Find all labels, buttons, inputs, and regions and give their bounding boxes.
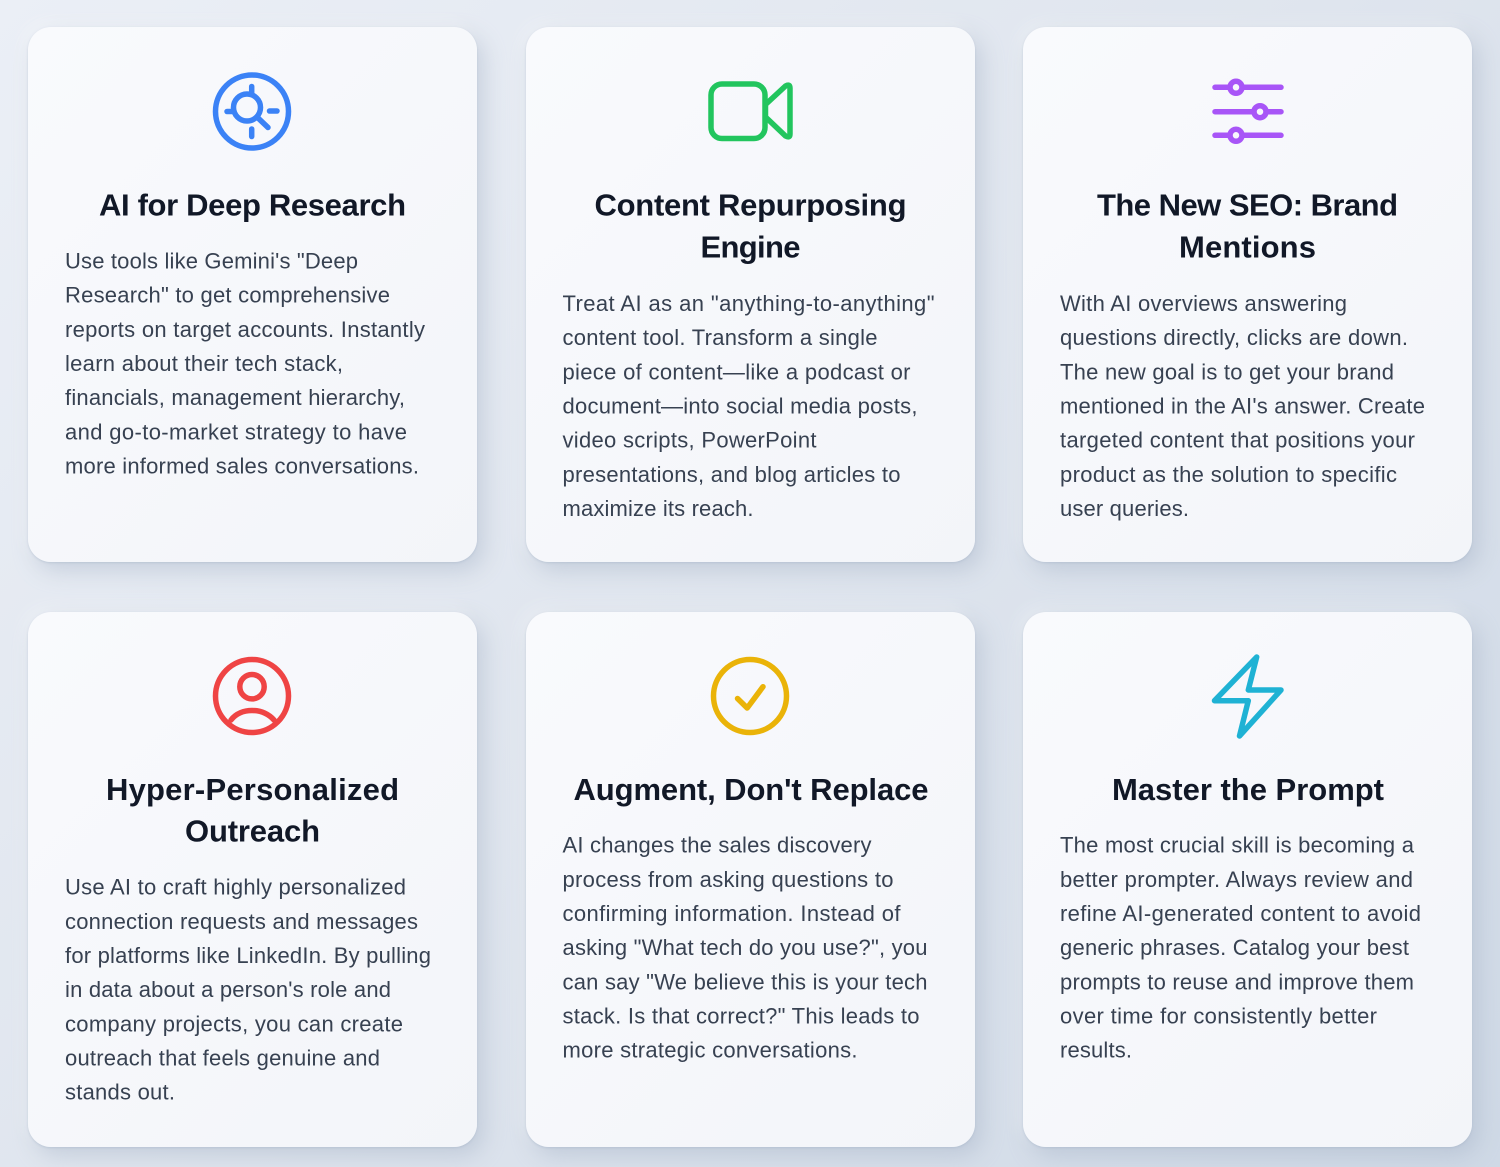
text block: generic phrases. Catalog your best	[1060, 935, 1409, 960]
text block: content tool. Transform a single	[562, 325, 877, 350]
heading: Hyper-Personalized	[106, 772, 399, 807]
text block: presentations, and blog articles to	[562, 462, 900, 487]
text block: piece of content—like a podcast or	[562, 359, 910, 384]
heading	[1097, 188, 1398, 264]
heading: Master the Prompt	[1112, 772, 1384, 807]
text block: product as the solution to specific	[1060, 462, 1397, 487]
text block: financials, management hierarchy,	[65, 385, 405, 410]
text block: user queries.	[1060, 496, 1189, 521]
text block: Research" to get comprehensive	[65, 283, 390, 308]
panel: Hyper-Personalized Outreach	[28, 612, 477, 1147]
heading: Mentions	[1179, 230, 1316, 264]
text block: and go-to-market strategy to have	[65, 419, 407, 444]
text block: over time for consistently better	[1060, 1003, 1377, 1028]
text block: can say "We believe this is your tech	[562, 969, 927, 994]
text block: video scripts, PowerPoint	[562, 428, 816, 453]
text block: outreach that feels genuine and	[65, 1045, 380, 1070]
text block: AI changes the sales discovery	[562, 833, 871, 858]
text block: company projects, you can create	[65, 1011, 403, 1036]
icon: sliders	[1215, 81, 1281, 141]
icon: research target with magnifier	[216, 75, 288, 148]
text block: With AI overviews answering	[1060, 291, 1347, 316]
text block	[1060, 291, 1425, 521]
panel: Augment, Don't Replace	[526, 612, 974, 1147]
icon: lightning bolt	[1214, 657, 1281, 736]
text block: document—into social media posts,	[562, 393, 917, 418]
heading: Outreach	[185, 814, 320, 849]
text block: prompts to reuse and improve them	[1060, 969, 1414, 994]
text block: The new goal is to get your brand	[1060, 359, 1394, 384]
text block: targeted content that positions your	[1060, 428, 1415, 453]
text block	[562, 291, 934, 521]
text block: maximize its reach.	[562, 496, 753, 521]
heading: Engine	[700, 230, 800, 264]
heading: Augment, Don't Replace	[573, 772, 928, 807]
text block: for platforms like LinkedIn. By pulling	[65, 943, 431, 968]
heading: AI for Deep Research	[99, 188, 406, 222]
text block: reports on target accounts. Instantly	[65, 317, 425, 342]
icon: user in circle	[216, 660, 288, 732]
text block: more informed sales conversations.	[65, 453, 419, 478]
text block: questions directly, clicks are down.	[1060, 325, 1408, 350]
panel: AI for Deep Research	[28, 27, 477, 562]
text block	[65, 875, 431, 1105]
text block: in data about a person's role and	[65, 977, 391, 1002]
text block	[65, 248, 425, 478]
text block: asking "What tech do you use?", you	[562, 935, 927, 960]
text block: connection requests and messages	[65, 909, 418, 934]
text block: results.	[1060, 1038, 1132, 1063]
text block: stands out.	[65, 1080, 175, 1105]
text block: process from asking questions to	[562, 867, 893, 892]
text block: stack. Is that correct?" This leads to	[562, 1003, 919, 1028]
text block	[1060, 833, 1421, 1063]
heading: Content Repurposing	[594, 188, 906, 222]
heading	[594, 188, 906, 264]
text block: confirming information. Instead of	[562, 901, 901, 926]
panel: Content Repurposing Engine	[526, 27, 974, 562]
panel: The New SEO: Brand Mentions	[1023, 27, 1472, 562]
heading	[106, 772, 399, 849]
text block: better prompter. Always review and	[1060, 867, 1413, 892]
icon: video camera	[710, 84, 790, 138]
text block	[562, 833, 927, 1063]
heading: The New SEO: Brand	[1097, 188, 1398, 222]
text block: refine AI-generated content to avoid	[1060, 901, 1421, 926]
panel: Master the Prompt	[1023, 612, 1472, 1147]
text block: The most crucial skill is becoming a	[1060, 833, 1415, 858]
text block: Treat AI as an "anything-to-anything"	[562, 291, 934, 316]
text block: mentioned in the AI's answer. Create	[1060, 393, 1425, 418]
text block: more strategic conversations.	[562, 1038, 857, 1063]
icon: check circle	[713, 660, 786, 732]
text block: learn about their tech stack,	[65, 351, 343, 376]
text block: Use AI to craft highly personalized	[65, 875, 406, 900]
text block: Use tools like Gemini's "Deep	[65, 248, 358, 274]
